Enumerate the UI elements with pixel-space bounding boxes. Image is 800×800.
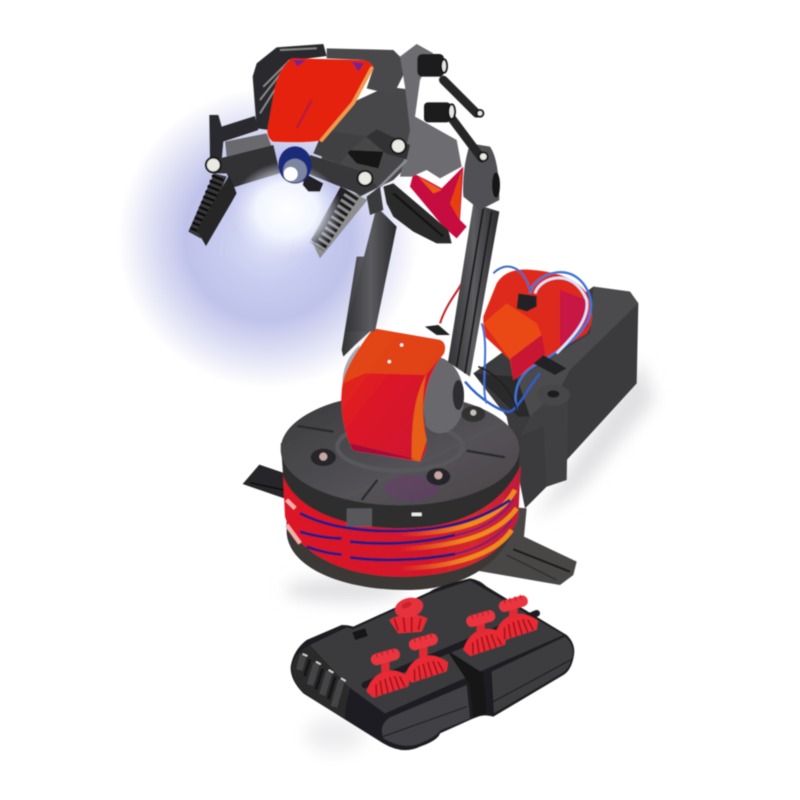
right finger	[311, 187, 367, 258]
turntable rim	[281, 443, 519, 528]
controller center seam	[447, 650, 487, 718]
upper robot (arms, wrist, gripper)	[188, 44, 500, 377]
rim latch	[347, 508, 372, 527]
shoulder ring	[337, 423, 463, 471]
red knob 3	[459, 609, 509, 657]
wrist body	[320, 87, 413, 197]
right foot	[473, 507, 577, 585]
blue LED light glow	[118, 88, 418, 388]
rear red servo box	[483, 269, 592, 380]
light diagonal strut	[367, 160, 407, 200]
wrist linkages	[417, 54, 482, 158]
disc screws	[311, 406, 485, 485]
lower robot (base, drum, rear box)	[243, 257, 638, 590]
turntable top	[281, 393, 519, 505]
left finger	[188, 173, 237, 246]
dark bracket under elbow	[383, 183, 452, 243]
red knob 2	[401, 632, 450, 684]
dark block below LED	[303, 173, 323, 192]
red knob 4	[491, 594, 540, 642]
red knob 1	[362, 647, 412, 699]
controller top face	[310, 581, 563, 713]
controller	[291, 578, 574, 750]
wire clips	[533, 355, 567, 375]
controller body	[291, 578, 574, 750]
rear arm strut lower	[342, 257, 389, 357]
pale highlights	[287, 500, 300, 543]
gear wheel	[253, 44, 327, 130]
gripper rear bracket	[209, 115, 272, 160]
dark window	[345, 150, 383, 168]
mounting post	[537, 384, 570, 406]
purple tint on disc	[385, 476, 438, 501]
gray crescent behind drum	[342, 345, 360, 393]
soft floor shadows	[285, 360, 655, 753]
screws	[206, 59, 488, 186]
rear arm strut upper	[345, 207, 397, 332]
shoulder red drum	[341, 328, 445, 462]
motor cylinder	[327, 48, 408, 95]
red top cover	[267, 58, 373, 142]
front arm strut	[448, 203, 499, 377]
wrist side plate	[400, 44, 462, 178]
faint light beams	[220, 203, 305, 257]
left foot	[243, 465, 285, 499]
purple lines	[300, 500, 510, 531]
controller switch	[352, 628, 368, 640]
gripper arm right	[307, 155, 377, 195]
shoulder gray disc	[423, 357, 464, 433]
red round knob	[389, 595, 427, 633]
elbow joint	[463, 143, 500, 210]
red elbow servo	[410, 167, 467, 238]
center body	[313, 130, 367, 163]
gripper crossbar	[207, 145, 280, 187]
wires	[440, 267, 591, 412]
turntable bottom plate	[286, 473, 518, 590]
light core	[232, 162, 342, 258]
LED light	[278, 146, 312, 184]
controller front shell	[382, 685, 470, 746]
controller right shell	[492, 637, 573, 713]
orange stripes	[397, 490, 517, 568]
control rod	[365, 613, 537, 685]
base housing	[473, 287, 638, 508]
upper arm bar	[366, 129, 410, 159]
controller end vents	[292, 645, 350, 719]
turntable red stack	[283, 467, 521, 577]
